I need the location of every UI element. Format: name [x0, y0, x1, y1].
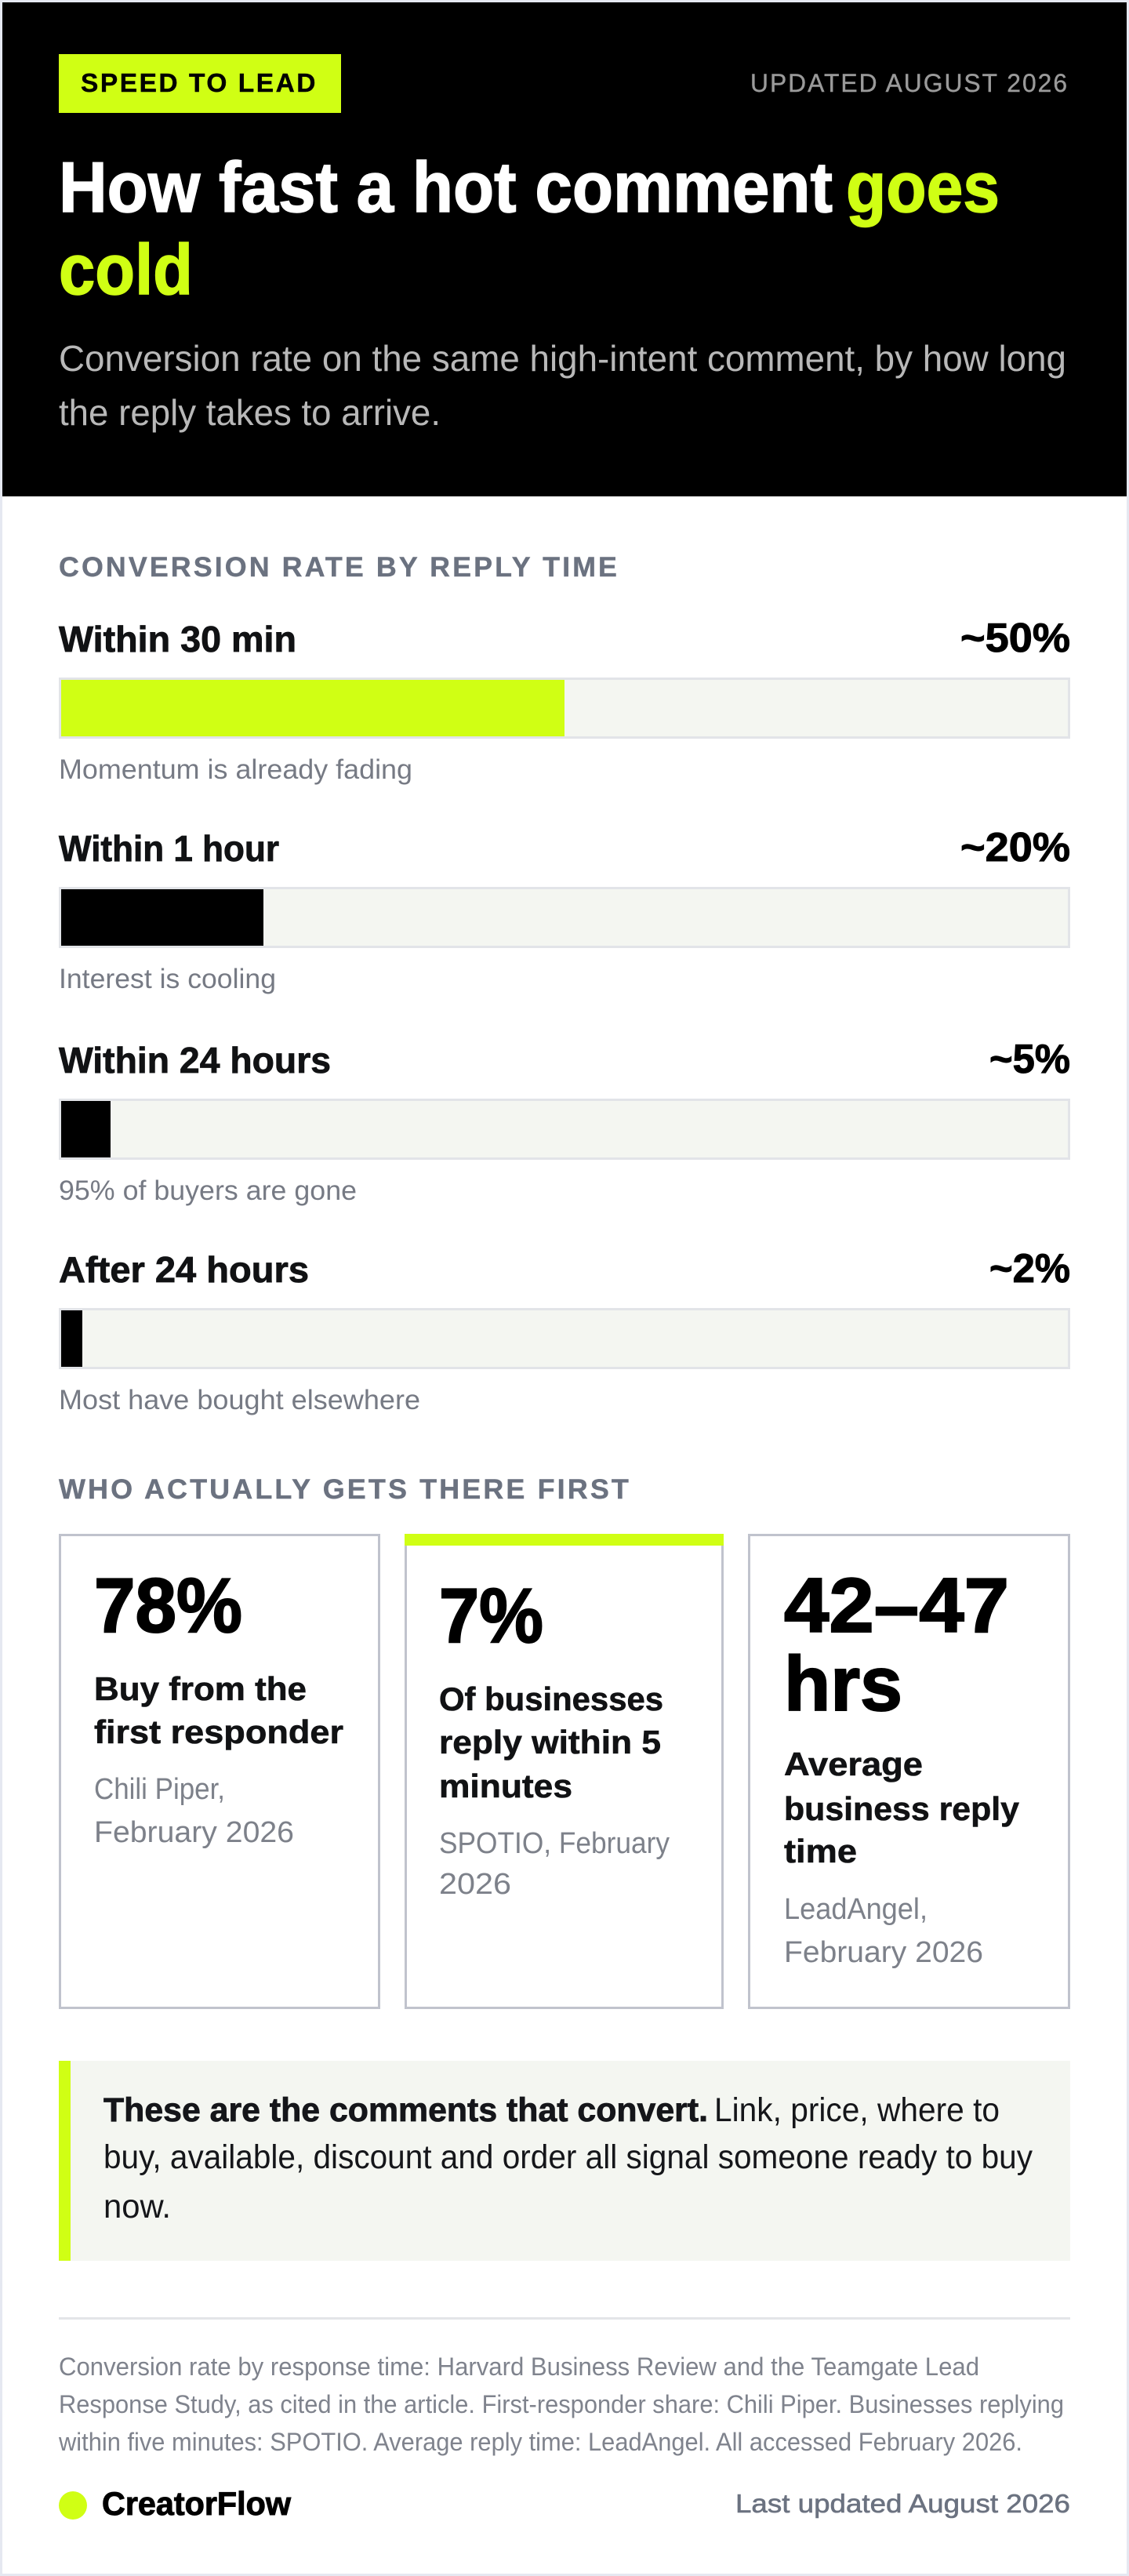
footnote: sources [58, 2353, 1064, 2456]
bar row: after 24 hours: After 24 hours [59, 1249, 309, 1290]
stat card: 42–47 hrs: business reply [784, 1790, 1020, 1827]
stat card: 78%: first responder [94, 1713, 343, 1750]
title: cold [59, 231, 193, 310]
footnote: sources: Response Study, as cited in the article. First-responder share: Chili Piper. Businesses replying [59, 2390, 1064, 2418]
stat card: 7%: Of businesses [439, 1680, 663, 1717]
stat card: 78%: Chili Piper, [94, 1773, 225, 1806]
stat card: 42–47 hrs: 42–47 [784, 1562, 1009, 1648]
stat card: 78%: 78% [94, 1562, 242, 1648]
bar row: within 24 hours: 95% of buyers are gone [59, 1175, 357, 1206]
bar row: within 24 hours: Within 24 hours [59, 1040, 331, 1081]
badge: speed to lead: SPEED TO LEAD [81, 68, 318, 97]
bar row: after 24 hours: Most have bought elsewhere [59, 1385, 420, 1415]
callout: now. [103, 2188, 171, 2225]
bar row: within 1 hour [59, 825, 1070, 994]
subtitle: Conversion rate on the same high-intent comment, by how long [59, 338, 1066, 379]
heading: who actually gets there first: WHO ACTUALLY GETS THERE FIRST [59, 1474, 631, 1505]
stat card: 7%: reply within 5 [439, 1724, 661, 1760]
bar row: within 24 hours: ~5% [989, 1037, 1070, 1082]
callout: buy, available, discount and order all signal someone ready to buy [103, 2138, 1033, 2176]
brand: CreatorFlow: CreatorFlow [102, 2485, 291, 2522]
stat card: 78% [60, 1535, 379, 2007]
callout: Link, price, where to [714, 2091, 1000, 2129]
heading: conversion rate by reply time: CONVERSION RATE BY REPLY TIME [59, 552, 619, 583]
stat card: 42–47 hrs: LeadAngel, [784, 1893, 928, 1926]
update date: UPDATED AUGUST 2026 [750, 69, 1069, 97]
stat card: 78%: February 2026 [94, 1816, 294, 1849]
bar row: after 24 hours: ~2% [989, 1246, 1070, 1292]
footer date: Last updated August 2026 [735, 2489, 1070, 2518]
stat card: 42–47 hrs: hrs [784, 1640, 902, 1727]
footnote: sources: within five minutes: SPOTIO. Average reply time: LeadAngel. All accessed February 2026. [58, 2428, 1022, 2456]
callout: These are the comments that convert. [103, 2091, 708, 2129]
subtitle: the reply takes to arrive. [59, 392, 441, 433]
callout [59, 2061, 1070, 2261]
title [59, 148, 1000, 310]
title: How fast a hot comment [59, 148, 833, 227]
stat card: 42–47 hrs: February 2026 [784, 1936, 983, 1969]
stat card: 7%: 2026 [439, 1868, 511, 1901]
stat card: 42–47 hrs: Average [784, 1746, 923, 1782]
stat card: 7% [405, 1534, 724, 2007]
bar row: within 30 min [59, 616, 1070, 785]
stat card: 7%: minutes [439, 1768, 572, 1804]
bar row: within 1 hour: ~20% [960, 825, 1070, 870]
footnote: sources: Conversion rate by response time: Harvard Business Review and the Teamgate Lead [59, 2353, 979, 2381]
bar row: within 30 min: ~50% [960, 616, 1070, 661]
bar row: within 30 min: Within 30 min [59, 619, 296, 659]
stat card: 7%: 7% [439, 1572, 543, 1659]
bar row: within 30 min: Momentum is already fading [59, 754, 412, 785]
badge: speed to lead [59, 54, 341, 113]
stat card: 42–47 hrs: time [784, 1833, 857, 1869]
stat card: 7%: SPOTIO, February [439, 1827, 670, 1860]
panel: header [2, 2, 1127, 496]
stat card: 42–47 hrs [750, 1535, 1069, 2007]
bar row: within 1 hour: Interest is cooling [59, 964, 276, 994]
bar row: within 24 hours [59, 1037, 1070, 1206]
bar row: within 1 hour: Within 1 hour [59, 828, 279, 869]
stat card: 78%: Buy from the [94, 1670, 307, 1707]
bar row: after 24 hours [59, 1246, 1070, 1415]
bar chart: conversion rate [59, 616, 1070, 1415]
title: goes [846, 148, 1000, 227]
subtitle [59, 338, 1066, 433]
